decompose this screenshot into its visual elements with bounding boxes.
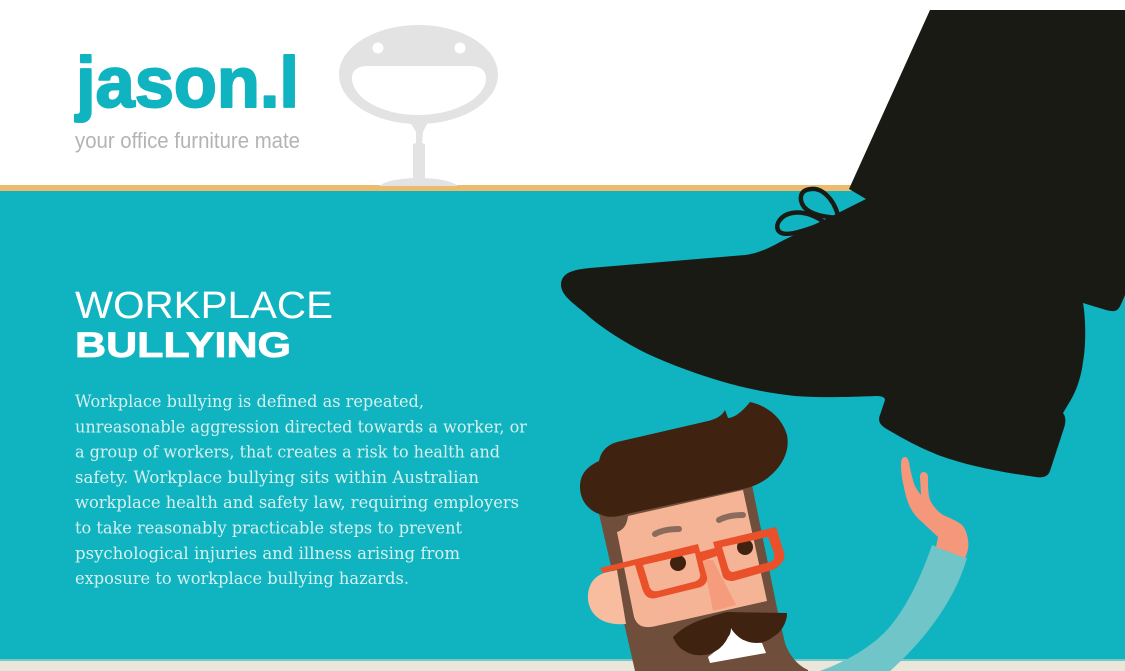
body paragraph: Workplace bullying is defined as repeated,	[75, 392, 424, 411]
shoe silhouette	[561, 10, 1125, 477]
white header band	[0, 0, 1125, 186]
teal main panel	[0, 191, 1125, 659]
hand	[901, 457, 968, 558]
shoelace loops	[777, 189, 838, 234]
title	[75, 285, 333, 365]
body paragraph: a group of workers, that creates a risk to health and	[75, 443, 500, 462]
teeth	[708, 628, 766, 663]
body paragraph	[75, 392, 527, 588]
nose	[703, 560, 736, 611]
hair	[580, 402, 788, 517]
logo: jason.l	[74, 44, 300, 153]
logo wordmark: jason.l	[74, 44, 299, 123]
chair eyes	[372, 42, 466, 54]
illustration: giant black shoe and trouser leg	[561, 10, 1125, 477]
chair stem and base	[379, 122, 458, 186]
body paragraph: safety. Workplace bullying sits within Australian	[75, 468, 479, 487]
cream footer band	[0, 659, 1125, 671]
glasses	[600, 527, 784, 598]
body paragraph: unreasonable aggression directed towards a worker, or	[75, 417, 527, 436]
icon: grey egg chair	[339, 25, 498, 186]
title line two: BULLYING	[75, 326, 291, 365]
face	[617, 490, 767, 627]
mustache	[673, 612, 787, 655]
illustration: arm and hand	[820, 457, 968, 671]
title line one: WORKPLACE	[75, 285, 333, 327]
ear	[588, 570, 626, 624]
orange divider bar	[0, 185, 1125, 191]
eyes	[670, 539, 753, 571]
logo tagline: your office furniture mate	[75, 128, 300, 153]
beard and head base	[597, 480, 808, 671]
body paragraph: psychological injuries and illness arising from	[75, 544, 460, 563]
eyebrows	[655, 515, 743, 534]
sleeve	[820, 545, 967, 671]
body paragraph: to take reasonably practicable steps to prevent	[75, 518, 462, 538]
illustration: bullied man's head	[580, 402, 808, 671]
chair shell	[339, 25, 498, 124]
body paragraph: exposure to workplace bullying hazards.	[75, 569, 409, 588]
body paragraph: workplace health and safety law, requiring employers	[75, 493, 519, 512]
